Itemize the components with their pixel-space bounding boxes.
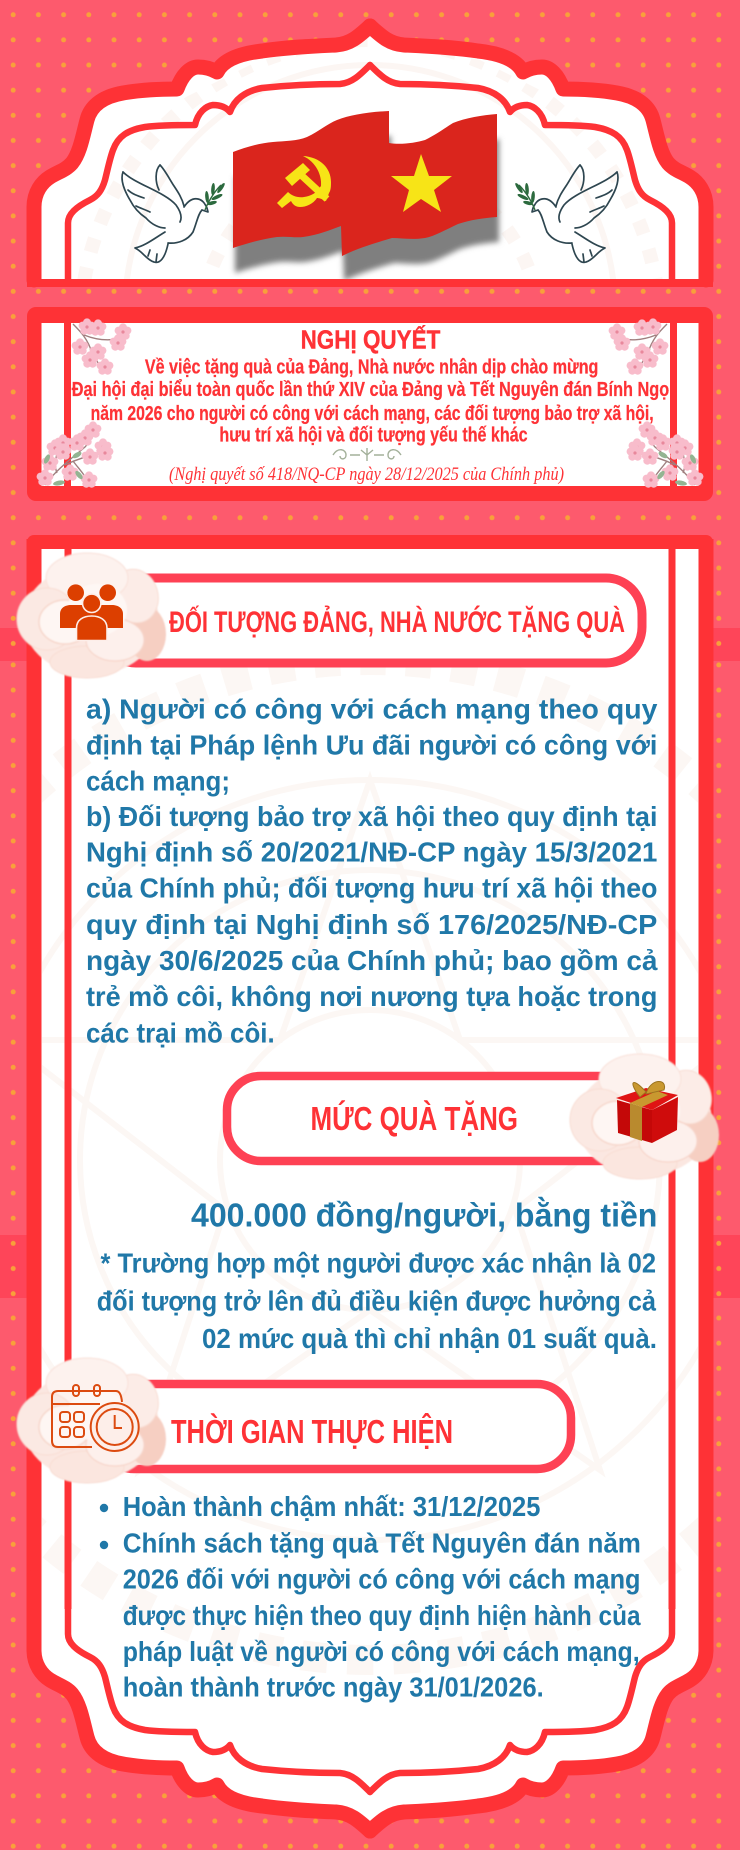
text: recipients list: a) Người có công với cách mạng theo quy	[86, 693, 658, 724]
flower behind gift icon	[570, 1054, 719, 1179]
text: recipients list: của Chính phủ; đối tượng hưu trí xã hội theo	[86, 873, 657, 904]
panel: top frame with flags	[26, 18, 714, 288]
flower behind people icon	[17, 553, 166, 678]
text: recipients list: trẻ mồ côi, không nơi nương tựa hoặc trong	[86, 981, 657, 1012]
icon: gift box	[616, 1081, 678, 1143]
text: resolution subject	[72, 356, 669, 447]
text: recipients list: quy định tại Nghị định số 176/2025/NĐ-CP	[86, 909, 657, 940]
blossom: bottom left	[37, 421, 113, 488]
text: gift note	[97, 1248, 657, 1354]
text: recipients list: b) Đối tượng bảo trợ xã hội theo quy định tại	[86, 801, 657, 832]
blossom: top right	[609, 318, 668, 375]
text: timeline bullets: pháp luật về người có công với cách mạng,	[123, 1636, 640, 1667]
text: gift note: * Trường hợp một người được xác nhận là 02	[100, 1248, 656, 1279]
icon: right dove	[514, 165, 618, 262]
heading: gift amount: MỨC QUÀ TẶNG	[310, 1100, 518, 1137]
flower behind calendar icon	[17, 1358, 166, 1483]
panel: resolution title	[27, 307, 713, 501]
text: timeline bullets: Chính sách tặng quà Tết Nguyên đán năm	[123, 1527, 641, 1558]
text: timeline bullets	[100, 1491, 641, 1703]
ornament	[333, 448, 401, 461]
text: citation: (Nghị quyết số 418/NQ-CP ngày 28/12/2025 của Chính phủ)	[169, 465, 564, 485]
text: gift note: đối tượng trở lên đủ điều kiện được hưởng cả	[97, 1286, 656, 1317]
icon: party and national flags	[233, 111, 497, 256]
text: recipients list	[86, 693, 658, 1048]
blossom: top left	[72, 318, 131, 375]
section header: recipients	[17, 553, 642, 678]
icon: yellow star	[391, 154, 452, 212]
text: recipients list: ngày 30/6/2025 của Chính phủ; bao gồm cả	[86, 945, 658, 976]
icon: flag shadow	[235, 136, 499, 281]
text: amount per person: 400.000 đồng/người, bằng tiền	[191, 1197, 657, 1234]
heading: NGHỊ QUYẾT: NGHỊ QUYẾT	[301, 324, 440, 354]
text: timeline bullets: hoàn thành trước ngày 31/01/2026.	[123, 1672, 544, 1703]
icon: calendar and clock	[52, 1385, 139, 1451]
text: timeline bullets: Hoàn thành chậm nhất: 31/12/2025	[123, 1491, 540, 1522]
text: gift note: 02 mức quà thì chỉ nhận 01 suất quà.	[202, 1323, 657, 1354]
text: resolution subject: Về việc tặng quà của Đảng, Nhà nước nhân dịp chào mừng	[145, 356, 598, 378]
text: recipients list: cách mạng;	[86, 766, 230, 796]
section header: timeline	[17, 1358, 571, 1483]
icon: left dove	[122, 165, 226, 262]
text: recipients list: các trại mồ côi.	[86, 1017, 275, 1048]
heading: timeline: THỜI GIAN THỰC HIỆN	[171, 1413, 453, 1450]
text: timeline bullets: được thực hiện theo quy định hiện hành của	[123, 1600, 641, 1631]
text: timeline bullets: 2026 đối với người có công với cách mạng	[123, 1563, 640, 1594]
text: recipients list: Nghị định số 20/2021/NĐ-CP ngày 15/3/2021	[86, 836, 657, 868]
section header: gift amount	[227, 1054, 719, 1179]
icon: hammer and sickle	[277, 156, 331, 208]
text: resolution subject: hưu trí xã hội và đối tượng yếu thế khác	[219, 425, 528, 447]
icon: people group	[60, 584, 123, 640]
panel: main content frame	[0, 535, 740, 1831]
text: recipients list: định tại Pháp lệnh Ưu đãi người có công với	[86, 730, 657, 760]
blossom: bottom right	[627, 421, 703, 488]
